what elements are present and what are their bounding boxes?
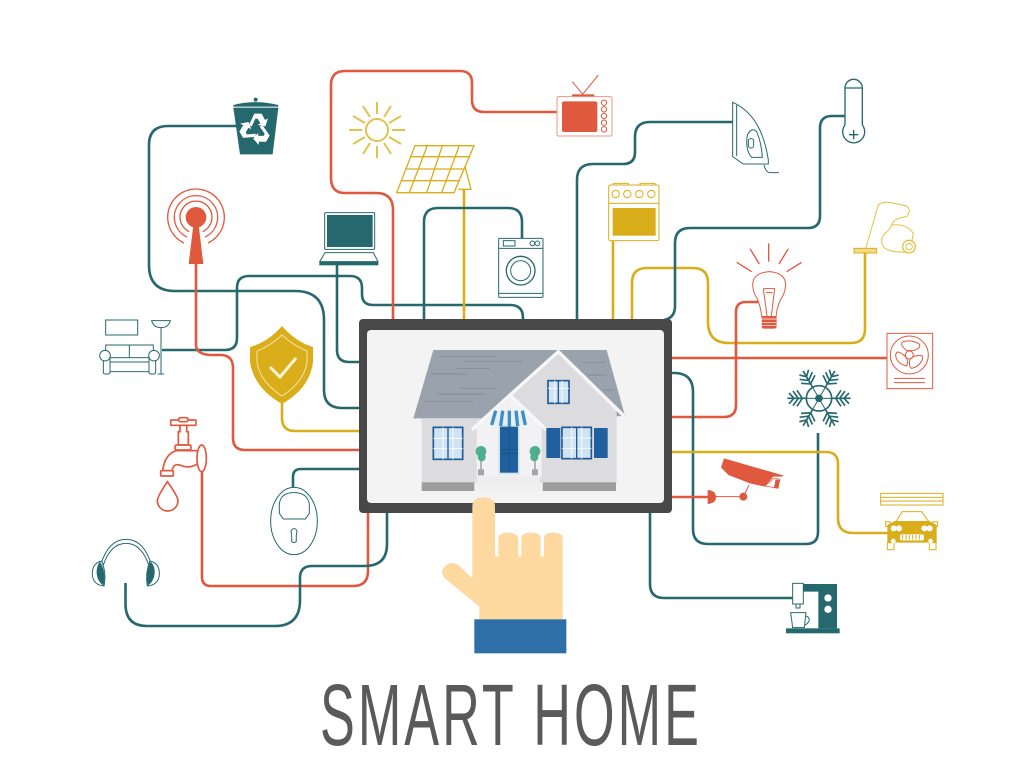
icon: security shield	[250, 326, 313, 404]
icon: washing machine	[499, 238, 543, 297]
potted plants	[476, 446, 540, 475]
gable trim	[472, 352, 624, 430]
icon: light bulb	[737, 243, 802, 329]
icon: faucet and drop	[157, 418, 206, 511]
wire: fan to tablet	[672, 357, 887, 359]
icon: car in garage	[881, 493, 943, 550]
icon: antenna signal	[168, 189, 224, 264]
icon: thermometer	[843, 79, 865, 143]
icon: sun	[349, 102, 405, 158]
wire: faucet to tablet	[202, 468, 368, 586]
tablet screen	[367, 330, 664, 503]
wire: washing machine to tablet	[424, 208, 522, 320]
windows	[433, 381, 608, 459]
wire: antenna to tablet	[196, 264, 360, 450]
wire: vacuum cleaner to tablet	[632, 253, 865, 343]
icon: vacuum cleaner	[854, 202, 915, 253]
front door	[498, 425, 520, 475]
wire: coffee machine to tablet	[650, 513, 793, 598]
roof	[413, 350, 625, 418]
icon: television	[557, 75, 612, 136]
connection wires	[126, 71, 888, 626]
lower-left icons	[92, 418, 317, 586]
house	[413, 350, 625, 491]
icon: headphones	[92, 539, 159, 586]
wire: thermometer to tablet	[664, 116, 845, 320]
right icons	[733, 79, 933, 389]
wire: bulb to tablet	[672, 302, 758, 417]
wire: laptop to tablet	[337, 265, 360, 362]
walls	[422, 352, 617, 491]
lower-right icons	[708, 367, 943, 633]
title: SMART HOME	[320, 667, 702, 764]
tablet	[359, 319, 672, 513]
hand	[442, 497, 566, 653]
wire: television to tablet	[331, 71, 557, 320]
wire: car to tablet	[672, 452, 888, 533]
top-middle icons	[397, 75, 659, 297]
wire: sofa to tablet	[162, 276, 523, 350]
icon: solar panel	[397, 146, 474, 193]
icon: recycling bin	[233, 98, 278, 154]
icon: stove	[609, 183, 659, 241]
wire: stove to tablet	[612, 240, 614, 320]
wire: shield to tablet	[282, 403, 360, 431]
icon: iron	[733, 102, 779, 173]
wire: trash to tablet	[149, 126, 360, 408]
icon: ventilation fan	[887, 333, 933, 389]
wire: snowflake to tablet	[672, 373, 818, 544]
top-left icons	[100, 98, 378, 374]
icon: coffee machine	[786, 583, 840, 633]
wire: iron to tablet	[577, 122, 733, 320]
sun icon wrapper	[349, 102, 405, 158]
sleeve cuff	[474, 619, 566, 653]
wire: solar panel to tablet	[463, 190, 465, 320]
icon: laptop	[319, 213, 378, 265]
icon: snowflake	[787, 367, 851, 430]
wire: headphones to tablet	[126, 513, 387, 626]
tablet frame	[359, 319, 672, 513]
icon: security camera	[708, 458, 784, 504]
awning	[490, 411, 527, 427]
wire: padlock to tablet	[293, 469, 360, 487]
icon: padlock	[271, 487, 317, 555]
hand palm and fingers	[442, 497, 563, 619]
icon: sofa and lamp	[100, 320, 170, 374]
wire: camera to tablet	[672, 496, 708, 498]
